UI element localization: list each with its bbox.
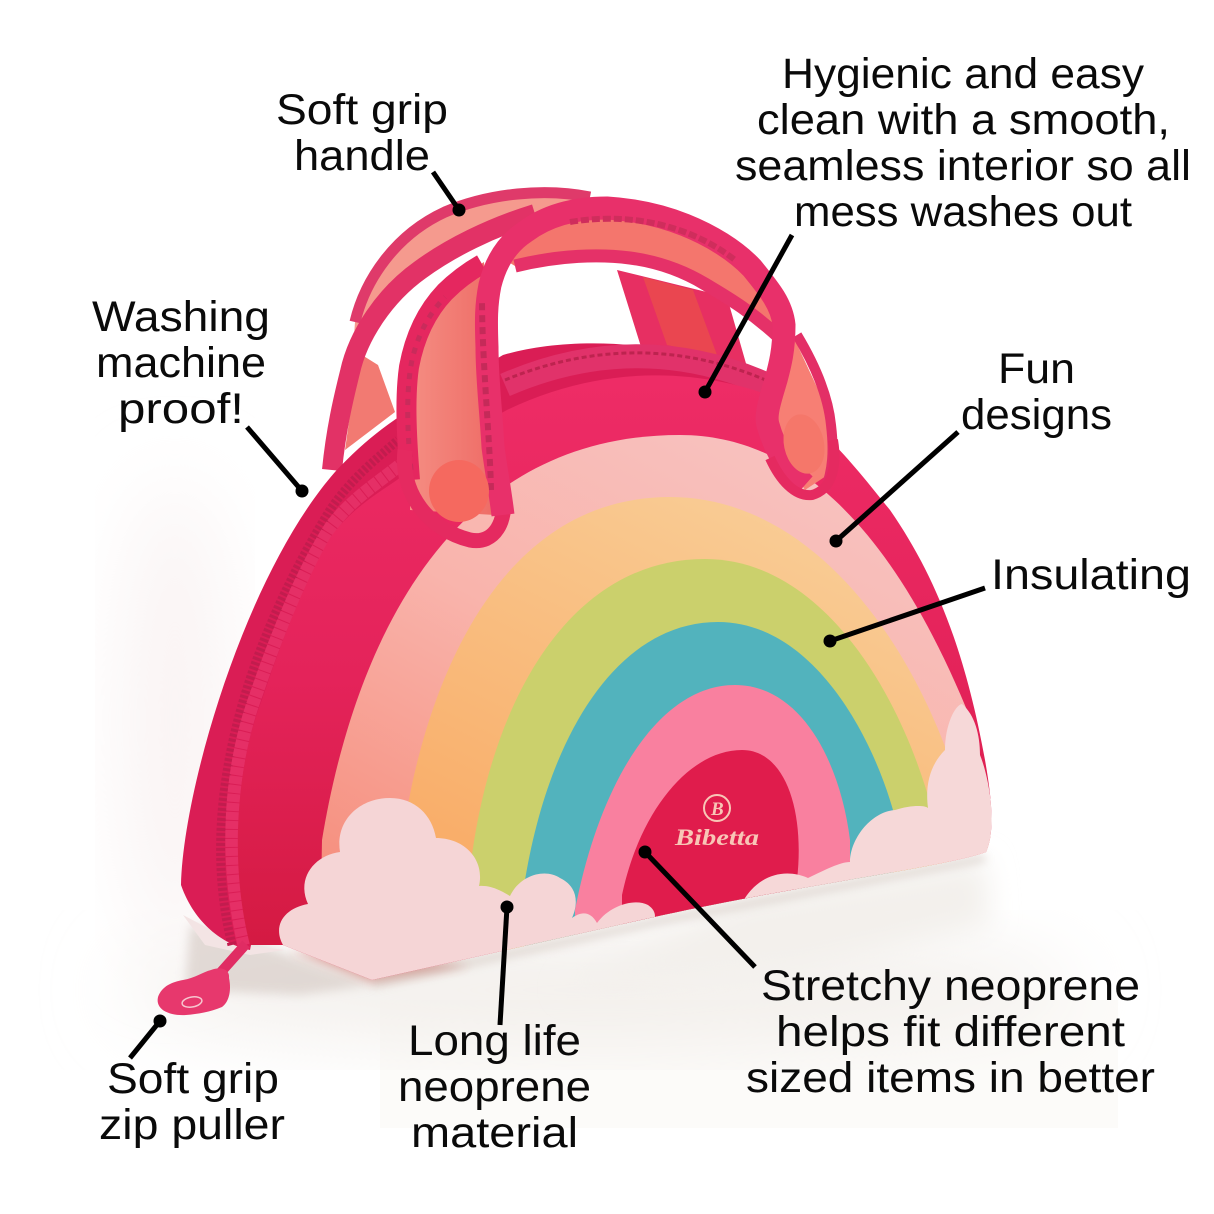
band: peach [400, 497, 950, 950]
top piping stitches [570, 219, 735, 260]
zip track left [221, 440, 398, 945]
band: teal [525, 622, 893, 950]
leader: soft grip handle [433, 172, 466, 216]
inner arch [622, 750, 799, 924]
rivet left [429, 460, 489, 522]
label: washing machine proof: proof! [118, 385, 244, 433]
back left strap leg [345, 355, 395, 450]
rivet right [778, 410, 830, 478]
label: soft grip handle: handle [294, 132, 430, 180]
zip top stitches [505, 353, 770, 382]
label: long life material: Long life [408, 1017, 581, 1065]
leader: fun designs [830, 432, 958, 548]
label: zip puller: zip puller [99, 1101, 285, 1149]
label: long life material [398, 1017, 591, 1157]
leader: washing machine [247, 427, 308, 498]
back right strap [617, 270, 767, 385]
strap top [505, 211, 782, 330]
inner piping [515, 256, 780, 338]
rainbow and clouds [279, 435, 1000, 985]
label: zip puller: Soft grip [107, 1055, 279, 1103]
lower loop right [770, 440, 834, 495]
back handle lower piping [332, 214, 535, 470]
label: hygienic interior: mess washes out [794, 188, 1132, 236]
label: stretchy neoprene: helps fit different [776, 1008, 1125, 1056]
front handle [404, 208, 835, 541]
cloud: left [279, 798, 655, 985]
label: soft grip handle: Soft grip [276, 86, 448, 134]
leader: hygienic [698, 235, 792, 398]
label: hygienic interior: Hygienic and easy [782, 50, 1145, 98]
back handle peach band [352, 193, 590, 365]
label: hygienic interior: clean with a smooth, [757, 96, 1170, 144]
right leg outer piping [797, 335, 833, 490]
label: stretchy neoprene [746, 962, 1155, 1102]
back handle [332, 193, 590, 470]
left leg outer piping [406, 264, 482, 480]
lunch bag [158, 193, 1000, 1015]
logo: Bibetta [674, 825, 759, 850]
label: hygienic interior [735, 50, 1191, 236]
band: green [470, 559, 932, 950]
label: fun designs: Fun [998, 345, 1075, 393]
label: fun designs [961, 345, 1112, 439]
band: pink [575, 685, 850, 950]
label: washing machine proof [92, 293, 270, 433]
label: washing machine proof: machine [96, 339, 266, 387]
label: zip puller [99, 1055, 285, 1149]
zip top track [505, 356, 770, 386]
main piping [486, 208, 805, 515]
label: insulating: Insulating [991, 551, 1191, 599]
floor shadow [185, 858, 985, 995]
back panel and zip gusset [181, 343, 830, 950]
label: soft grip handle [276, 86, 448, 180]
logo: B [710, 799, 724, 820]
back handle top piping [355, 193, 590, 322]
leader: zip puller [130, 1014, 166, 1058]
leader: long life [500, 900, 514, 1025]
zip piping left [232, 465, 400, 945]
left leg outer stitches [408, 297, 445, 470]
label: stretchy neoprene: Stretchy neoprene [761, 962, 1140, 1010]
strap left leg [410, 262, 495, 515]
label: stretchy neoprene: sized items in better [746, 1054, 1155, 1102]
background glow [120, 480, 1118, 1128]
band: pale pink [322, 435, 990, 862]
label: long life material: material [411, 1109, 578, 1157]
cloud: right [745, 704, 993, 905]
leader: stretchy neoprene [638, 846, 755, 967]
logo [674, 795, 759, 850]
zip puller [158, 944, 246, 1015]
label: fun designs: designs [961, 391, 1112, 439]
leader: insulating [824, 588, 985, 648]
front panel [238, 375, 992, 980]
label: long life material: neoprene [398, 1063, 591, 1111]
label: washing machine proof: Washing [92, 293, 270, 341]
main piping stitches [482, 300, 491, 490]
strap right leg [770, 325, 835, 490]
underside of bag [183, 915, 285, 955]
lower loop [404, 450, 504, 541]
label: hygienic interior: seamless interior so all [735, 142, 1191, 190]
